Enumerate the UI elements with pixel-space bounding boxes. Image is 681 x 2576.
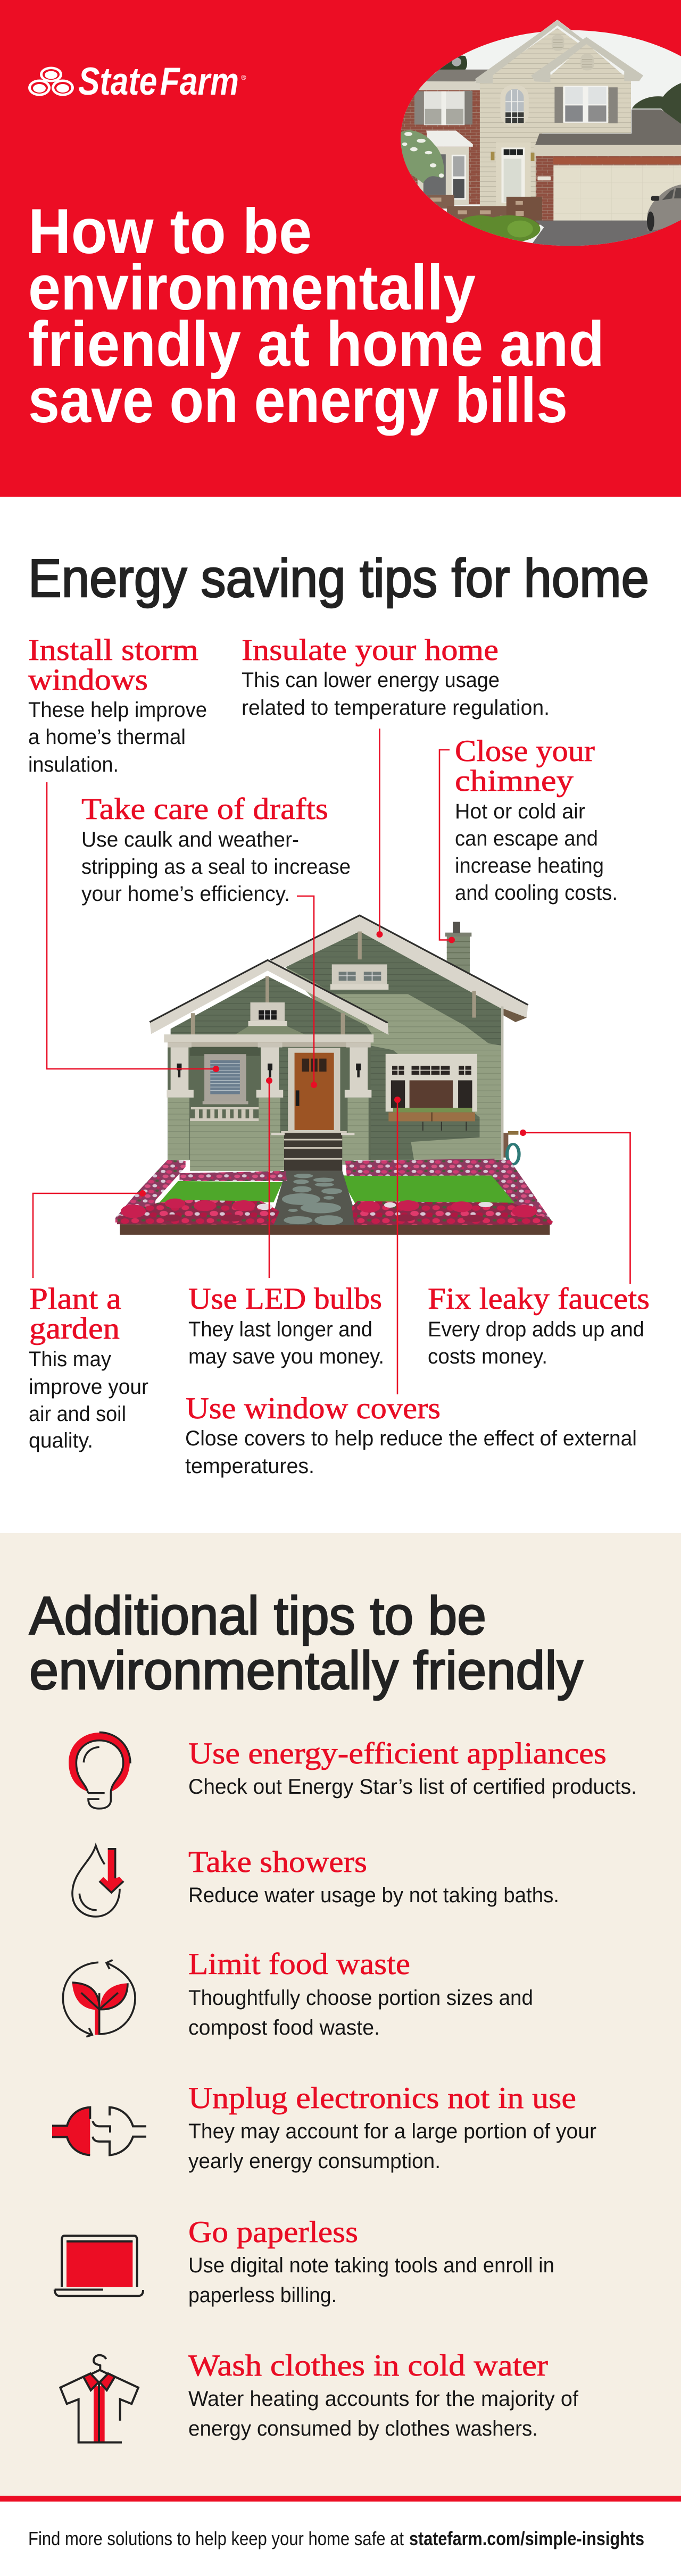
heading: environmentally friendly (29, 1641, 583, 1701)
leader line: garden (33, 1190, 146, 1278)
leader line: chimney (439, 750, 455, 943)
callout: fix leaky faucets (428, 1282, 650, 1368)
tip: limit food waste (188, 1947, 533, 2039)
callout: plant a garden: Plant a (29, 1282, 121, 1316)
title: environmentally (28, 252, 476, 323)
callout: take care of drafts: your home’s efficiency. (81, 882, 290, 906)
callout: use window covers (185, 1392, 637, 1478)
leader line: insulate (377, 729, 383, 938)
callout: use window covers: temperatures. (185, 1454, 314, 1478)
callout: close your chimney: can escape and (455, 827, 598, 850)
tip: unplug electronics: They may account for a large portion of your (188, 2120, 596, 2143)
tip: use energy-efficient appliances: Check out Energy Star’s list of certified products. (188, 1775, 637, 1799)
footer: Find more solutions to help keep your home safe at (28, 2528, 404, 2549)
heading (29, 1586, 583, 1701)
tip: take showers: Reduce water usage by not taking baths. (188, 1884, 559, 1907)
callout: close your chimney: increase heating (455, 854, 604, 877)
illustration: green craftsman house with garden (115, 915, 553, 1235)
tip: unplug electronics: Unplug electronics not in use (188, 2081, 576, 2115)
callout: install storm windows: These help improve (28, 698, 207, 722)
tip: go paperless: Use digital note taking tools and enroll in (188, 2254, 554, 2277)
tip: wash clothes in cold water: Water heating accounts for the majority of (188, 2387, 579, 2411)
panel: energy saving tips for home (28, 549, 650, 1478)
callout: close your chimney: chimney (455, 764, 574, 798)
tip: take showers (188, 1845, 559, 1907)
callout: install storm windows (28, 633, 207, 776)
title: save on energy bills (28, 365, 568, 436)
tip: wash clothes in cold water (188, 2349, 579, 2440)
callout: take care of drafts: Use caulk and weather- (81, 828, 299, 851)
leader line: LED bulbs (266, 1077, 272, 1278)
footer: statefarm.com/simple-insights (409, 2528, 644, 2549)
callout: close your chimney: Close your (455, 734, 595, 768)
tip: wash clothes in cold water: Wash clothes in cold water (188, 2349, 548, 2382)
callout: install storm windows: insulation. (28, 753, 119, 776)
callout: insulate your home: This can lower energy usage (242, 668, 500, 692)
callout: take care of drafts (81, 792, 351, 906)
tip: limit food waste: compost food waste. (188, 2016, 380, 2039)
tip: use energy-efficient appliances: Use energy-efficient appliances (188, 1737, 607, 1770)
leader line: drafts (297, 896, 317, 1088)
callout: fix leaky faucets: Every drop adds up and (428, 1318, 644, 1341)
callout: plant a garden: quality. (29, 1429, 93, 1452)
callout: insulate your home (242, 633, 550, 720)
callout: use LED bulbs (188, 1282, 384, 1368)
heading: Energy saving tips for home (28, 549, 649, 608)
callout: use LED bulbs: They last longer and (188, 1318, 372, 1341)
leader line: storm windows (47, 782, 219, 1072)
callout: plant a garden: air and soil (29, 1402, 126, 1426)
tip: take showers: Take showers (188, 1845, 367, 1879)
logo: State Farm: State Farm (78, 60, 239, 103)
leader line: window covers (394, 1097, 401, 1394)
callout: fix leaky faucets: costs money. (428, 1345, 547, 1368)
icon: plug and socket (52, 2107, 146, 2155)
panel: additional tips (0, 1533, 681, 2496)
footer (0, 2496, 681, 2549)
callout: close your chimney: Hot or cold air (455, 800, 585, 823)
logo: State Farm: ® (241, 73, 246, 81)
title (28, 196, 604, 436)
title: How to be (28, 196, 312, 267)
tip: use energy-efficient appliances (188, 1737, 637, 1799)
title: friendly at home and (28, 308, 604, 380)
callout: take care of drafts: stripping as a seal to increase (81, 855, 351, 879)
icon: seedling in recycling circle (63, 1960, 135, 2037)
callout: use LED bulbs: Use LED bulbs (188, 1282, 382, 1316)
callout: plant a garden (29, 1282, 148, 1452)
photo: suburban house in oval (394, 17, 681, 254)
tip: go paperless (188, 2215, 554, 2307)
callout: plant a garden: garden (29, 1312, 120, 1345)
callout: plant a garden: improve your (29, 1375, 148, 1399)
callout: install storm windows: Install storm (28, 633, 198, 667)
icon: laptop (55, 2236, 143, 2296)
leader line: faucets (520, 1130, 630, 1284)
icon: light bulb (69, 1733, 130, 1809)
icon: water drop with arrow (72, 1846, 123, 1917)
callout: install storm windows: windows (28, 663, 148, 697)
tip: go paperless: Go paperless (188, 2215, 358, 2249)
callout: take care of drafts: Take care of drafts (81, 792, 328, 826)
callout: install storm windows: a home’s thermal (28, 725, 186, 749)
heading: Additional tips to be (29, 1586, 486, 1646)
panel: hero (0, 0, 681, 497)
callout: insulate your home: related to temperature regulation. (242, 696, 550, 720)
callout: use window covers: Close covers to help reduce the effect of external (185, 1427, 637, 1450)
icon: shirt on hanger (60, 2355, 138, 2443)
logo: State Farm (28, 60, 246, 103)
callout: fix leaky faucets: Fix leaky faucets (428, 1282, 650, 1316)
callout: close your chimney (455, 734, 618, 905)
callout: use LED bulbs: may save you money. (188, 1345, 384, 1368)
tip: unplug electronics (188, 2081, 596, 2173)
callout: close your chimney: and cooling costs. (455, 881, 618, 905)
callout: insulate your home: Insulate your home (242, 633, 499, 667)
callout: plant a garden: This may (29, 1348, 111, 1371)
tip: limit food waste: Thoughtfully choose portion sizes and (188, 1986, 533, 2010)
tip: go paperless: paperless billing. (188, 2284, 337, 2307)
tip: limit food waste: Limit food waste (188, 1947, 410, 1981)
callout: use window covers: Use window covers (186, 1392, 441, 1425)
tip: unplug electronics: yearly energy consumption. (188, 2150, 441, 2173)
tip: wash clothes in cold water: energy consumed by clothes washers. (188, 2417, 538, 2440)
